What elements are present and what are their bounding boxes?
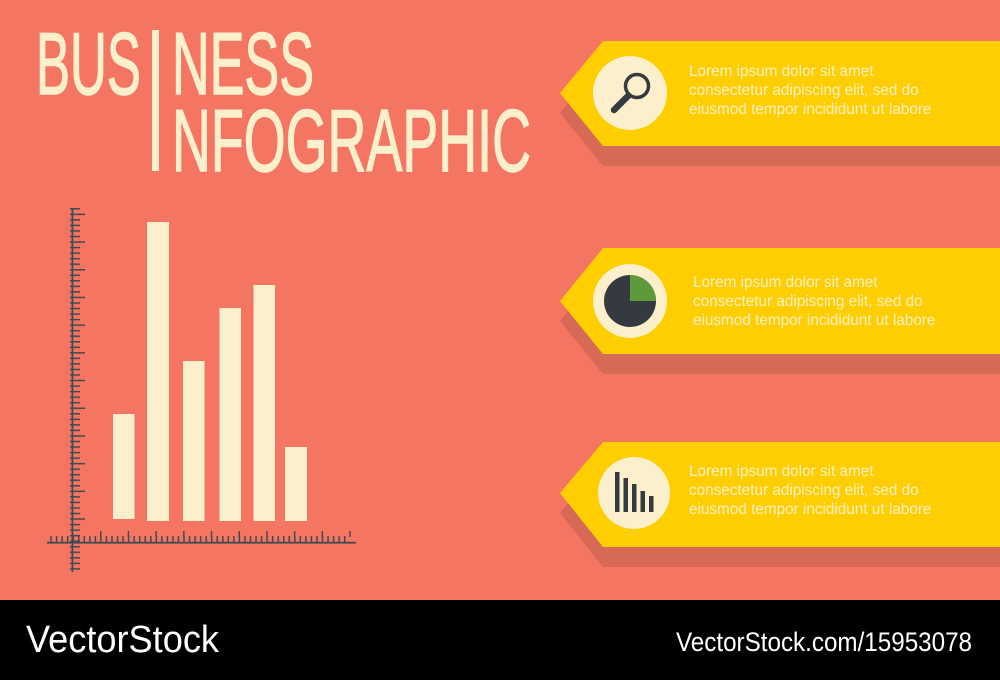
- icon: magnifier: [593, 56, 667, 130]
- title: NESS: [172, 14, 314, 113]
- text 1: consectetur adipiscing elit, sed do: [689, 82, 919, 99]
- text 2: consectetur adipiscing elit, sed do: [693, 293, 923, 310]
- title: [36, 14, 531, 190]
- banner 2: [560, 248, 1000, 374]
- title: BUS: [36, 14, 141, 113]
- bar chart: [47, 208, 356, 572]
- text 2: Lorem ipsum dolor sit amet: [693, 274, 878, 291]
- footer: [0, 600, 1000, 680]
- banner 3: [560, 442, 1000, 567]
- icon: bar chart: [598, 457, 670, 529]
- text 3: eiusmod tempor incididunt ut labore: [689, 501, 931, 518]
- banner 1: [560, 41, 1000, 166]
- text 2: eiusmod tempor incididunt ut labore: [693, 312, 935, 329]
- text 1: eiusmod tempor incididunt ut labore: [689, 101, 931, 118]
- text 3: Lorem ipsum dolor sit amet: [689, 463, 874, 480]
- text 1: Lorem ipsum dolor sit amet: [689, 63, 874, 80]
- title: NFOGRAPHIC: [172, 91, 531, 190]
- icon: pie chart: [593, 264, 667, 338]
- footer: VectorStock: [26, 619, 220, 661]
- text 3: consectetur adipiscing elit, sed do: [689, 482, 919, 499]
- footer: VectorStock.com/15953078: [676, 627, 972, 657]
